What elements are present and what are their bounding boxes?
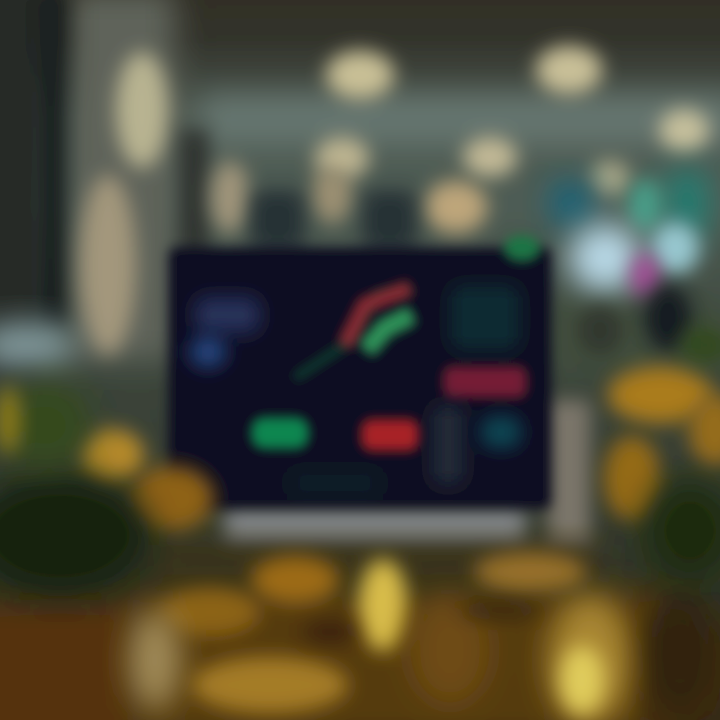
panel: right data column [432,285,526,485]
panel: left blue chart [190,297,260,367]
monitor screen [168,235,552,509]
gold nuggets [80,367,720,720]
monitor stand glow [225,400,590,550]
left wall and columns [0,0,208,380]
dark objects above monitor [250,190,417,250]
indicator: green button [252,418,308,448]
ceiling lights [211,46,709,233]
green foliage right [644,327,720,580]
corner: green highlight [504,235,540,261]
green foliage left [0,383,150,595]
panel: lower teal chart [290,472,380,494]
chart: rising red and green line [295,288,412,378]
gold foreground base [0,545,720,720]
indicator: red button [362,420,418,450]
dark gaps between nuggets [302,590,710,710]
colourful screen at right [548,170,710,356]
